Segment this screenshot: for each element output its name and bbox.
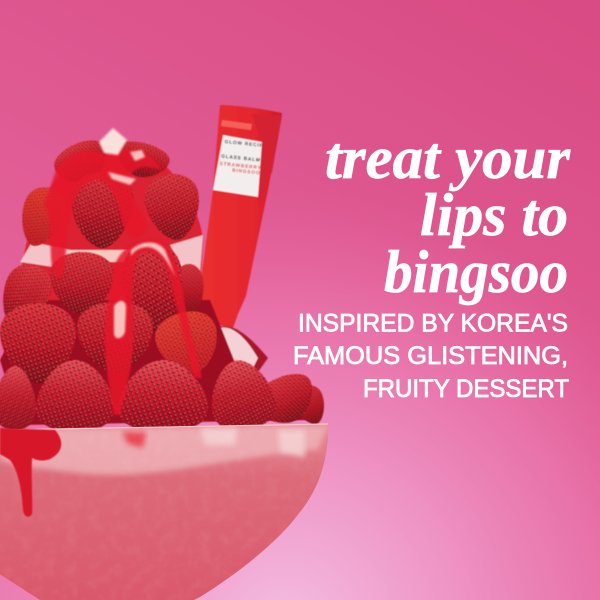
- headline: treat your: [325, 125, 571, 191]
- ice band in the bowl: [0, 424, 330, 600]
- headline: bingsoo: [384, 239, 568, 305]
- strawberry syrup drizzle: [44, 149, 202, 415]
- syrup drip: [0, 428, 61, 517]
- product label: GLASS BALM: [221, 154, 261, 164]
- product label: BINGSOO: [232, 168, 261, 176]
- headline: lips to: [420, 182, 568, 248]
- product label: STRAWBERRY: [219, 161, 262, 171]
- bowl rim highlight: [0, 424, 328, 430]
- product label: [213, 135, 268, 197]
- glass bowl with shaved ice: [0, 424, 330, 600]
- subheading: INSPIRED BY KOREA'S: [298, 310, 568, 338]
- subheading: FRUITY DESSERT: [363, 375, 569, 403]
- headline: [325, 125, 571, 305]
- product label: GLOW RECIPE: [224, 139, 268, 149]
- ice and syrup highlights: [99, 128, 176, 338]
- shaved ice mound: [0, 142, 310, 425]
- subheading: FAMOUS GLISTENING,: [293, 342, 568, 370]
- product tube: glass balm: [200, 105, 282, 328]
- strawberries: [0, 133, 331, 435]
- subheading: [293, 310, 569, 403]
